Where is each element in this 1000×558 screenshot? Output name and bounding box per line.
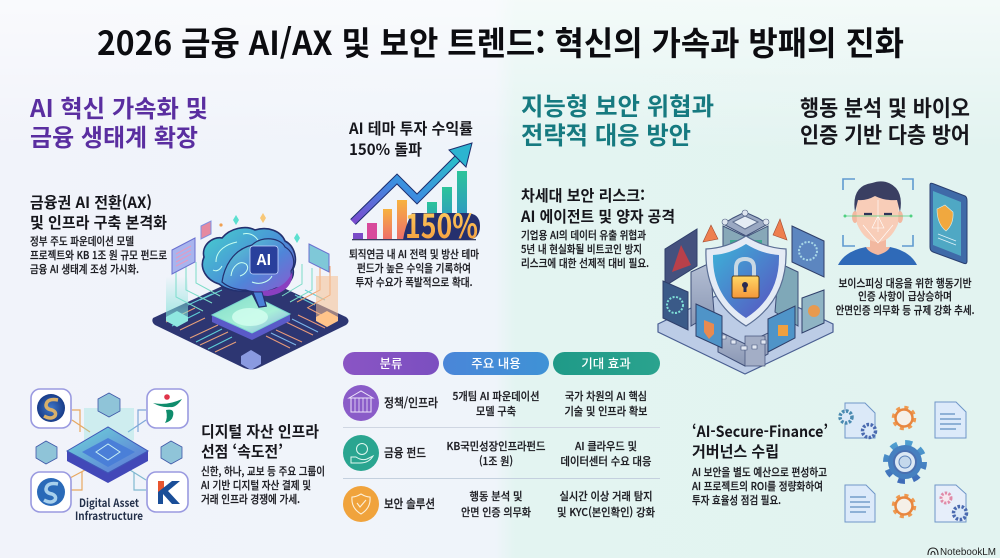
text block: AI-Secure-Finance governance — [692, 420, 828, 508]
text block: AX infrastructure: 및 인프라 구축 본격화 — [30, 211, 167, 233]
text block: digital asset race: 거래 인프라 경쟁에 가세. — [201, 491, 300, 507]
sub: AI chip label: AI — [256, 249, 271, 270]
sub: shield with padlock — [706, 236, 786, 326]
text block: chart description — [349, 246, 479, 290]
logo: NotebookLM: NotebookLM — [940, 546, 996, 558]
icon: document bottom left — [845, 485, 875, 522]
sub: left teal block — [166, 311, 188, 327]
icon: cubes — [36, 393, 182, 464]
sub: fingerprint panel right — [792, 226, 824, 277]
text block: digital asset race: 디지털 자산 인프라 — [201, 420, 319, 442]
sub: tower — [722, 210, 769, 262]
illustration: castle and shield — [658, 210, 833, 374]
label: digital asset infrastructure: Digital Asset — [79, 495, 139, 511]
sub: header pills — [343, 352, 660, 375]
sub: expected effect column: 국가 차원의 AI 핵심 — [565, 388, 647, 404]
label: digital asset infrastructure — [75, 495, 143, 524]
text block: behavioral authentication: 인증 사항이 급상승하며 — [858, 288, 952, 304]
sub: threat panel — [665, 229, 697, 286]
sub: AI chip label — [250, 246, 278, 274]
text block: AI-Secure-Finance governance: ‘AI-Secure-Finance’ — [692, 420, 828, 442]
sub: expected effect column: 데이터센터 수요 대응 — [560, 453, 652, 469]
panel: security section heading: 지능형 보안 위협과 — [521, 88, 714, 123]
text block: behavioral authentication: 안면인증 의무화 등 규제 강화 추세. — [836, 302, 974, 318]
panel: AI innovation section heading: 금융 생태계 확장 — [30, 118, 198, 153]
callout: 150 percent badge: 150% — [405, 200, 478, 248]
panel: investment return chart — [348, 117, 480, 290]
illustration: gears and documents — [840, 402, 966, 522]
text block: digital asset race: 선점 ‘속도전’ — [201, 440, 283, 462]
sub: main content column: 모델 구축 — [476, 403, 516, 419]
icon: central gear — [886, 443, 924, 481]
sub: bottom cube — [241, 350, 261, 370]
panel: security section heading: 전략적 대응 방안 — [521, 117, 691, 152]
icon: policy building — [343, 385, 379, 421]
sub: brain — [202, 228, 295, 307]
sub: header pills: 기대 효과 — [581, 353, 631, 372]
text block: AX infrastructure: 프로젝트와 KB 1조 원 규모 펀드로 — [30, 247, 167, 263]
text block: AX infrastructure: 정부 주도 파운데이션 모델 — [30, 233, 134, 249]
sub: holo beam — [84, 408, 134, 452]
bar chart — [352, 171, 476, 240]
sub: expected effect column: 및 KYC(본인확인) 강화 — [557, 504, 655, 520]
sub: row labels: 보안 솔루션 — [384, 495, 435, 512]
text block: behavioral authentication: 보이스피싱 대응을 위한 행동기반 — [838, 275, 972, 291]
sub: header pills: 분류 — [379, 353, 403, 372]
sub: row labels: 정책/인프라 — [384, 394, 438, 411]
text block: digital asset race — [201, 420, 325, 507]
text block: AI-Secure-Finance governance: AI 프로젝트의 ROI를 정량화하여 — [692, 478, 823, 494]
sub: main content column: 안면 인증 의무화 — [461, 504, 531, 520]
text block: next-gen security risk: 차세대 보안 리스크: — [521, 184, 645, 206]
heading: behavioral and biometric defense: 행동 분석 및 바이오 — [800, 91, 970, 123]
sub: expected effect column: 실시간 이상 거래 탐지 — [560, 488, 652, 504]
text block: next-gen security risk: 5년 내 현실화될 비트코인 방지 — [521, 241, 642, 257]
text block: AX infrastructure — [30, 191, 167, 277]
sub: scan frame — [843, 179, 913, 246]
sub: main content column — [446, 388, 546, 520]
text block: digital asset race: AI 기반 디지털 자산 결제 및 — [201, 477, 311, 493]
sub: main content column: 행동 분석 및 — [470, 488, 522, 504]
illustration: digital asset infrastructure — [31, 389, 188, 524]
text block: behavioral authentication — [836, 275, 974, 318]
sub: fingerprint panel left — [663, 281, 688, 330]
text block: next-gen security risk: 리스크에 대한 선제적 대비 필요. — [521, 255, 649, 271]
arrow: rising trend — [353, 143, 472, 222]
sub: expected effect column — [557, 388, 655, 520]
text block: AI-Secure-Finance governance: 거버넌스 수립 — [692, 440, 779, 462]
illustration: AI brain on circuit platform — [152, 213, 348, 370]
sub: central chip — [212, 296, 290, 340]
sub: main content column: (1조 원) — [479, 453, 513, 469]
sub: row labels — [384, 394, 438, 512]
panel: security section heading — [521, 88, 714, 152]
heading: 150 percent: 150% 돌파 — [349, 138, 422, 160]
heading: 150 percent — [348, 117, 473, 160]
title: 2026 금융 AI/AX 및 보안 트렌드: 혁신의 가속과 방패의 진화 — [97, 17, 904, 65]
icon: document with gears bottom right — [935, 485, 966, 522]
sub: row labels: 금융 펀드 — [384, 444, 426, 461]
text block: AI-Secure-Finance governance: AI 보안을 별도 예산으로 편성하고 — [692, 464, 827, 480]
panel: AI innovation section heading — [29, 89, 208, 153]
sub: floating holo panels — [172, 221, 329, 274]
sub: warning triangles — [703, 219, 787, 242]
text block: AI-Secure-Finance governance: 투자 효율성 점검 필요. — [692, 492, 781, 508]
icon: Shinhan logo top — [31, 389, 71, 428]
sub: front blocks — [696, 290, 824, 352]
sub: sparkles — [219, 213, 300, 243]
sub: expected effect column: AI 클라우드 및 — [575, 438, 637, 454]
icon: security shield — [343, 486, 379, 522]
text block: chart description: 퇴직연금 내 AI 전력 및 방산 테마 — [349, 246, 479, 262]
illustration: face recognition — [838, 179, 917, 265]
sub: expected effect column: 기술 및 인프라 확보 — [564, 403, 648, 419]
icon: orange gear top — [894, 408, 914, 428]
sub: central platform — [67, 427, 148, 483]
sub: walls — [691, 263, 714, 326]
text block: AX infrastructure: 금융 AI 생태계 조성 가시화. — [30, 261, 139, 277]
text block: AX infrastructure: 금융권 AI 전환(AX) — [30, 191, 152, 213]
icon: phone with shield — [930, 183, 967, 264]
icon: K logo — [147, 472, 188, 512]
icon: orange gear bottom — [894, 496, 914, 516]
text block: next-gen security risk — [520, 184, 675, 271]
icon: document with gears top — [840, 403, 876, 438]
text block: chart description: 펀드가 높은 수익을 기록하여 — [357, 260, 471, 276]
label: digital asset infrastructure: Infrastructure — [75, 508, 143, 524]
icon: Hana logo — [147, 389, 188, 428]
icon: document top right — [935, 402, 966, 438]
panel: AI innovation section heading: AI 혁신 가속화 및 — [29, 89, 208, 124]
text block: chart description: 투자 수요가 폭발적으로 확대. — [356, 274, 472, 290]
sub: main content column: KB국민성장인프라펀드 — [446, 438, 546, 454]
heading: 150 percent: AI 테마 투자 수익률 — [348, 117, 473, 139]
panel: summary table — [343, 352, 660, 522]
sub: main content column: 5개팀 AI 파운데이션 — [452, 388, 540, 404]
heading: behavioral and biometric defense: 인증 기반 다층 방어 — [800, 118, 970, 150]
text block: next-gen security risk: AI 에이전트 및 양자 공격 — [520, 205, 675, 227]
sub: right orange block — [316, 311, 338, 327]
icon: money hand — [343, 435, 379, 471]
heading: behavioral and biometric defense — [800, 91, 970, 150]
icon: Shinhan logo bottom — [31, 472, 71, 512]
text block: next-gen security risk: 기업용 AI의 데이터 유출 위협과 — [521, 227, 646, 243]
text block: digital asset race: 신한, 하나, 교보 등 주요 그룹이 — [201, 463, 325, 479]
sub: header pills: 주요 내용 — [471, 353, 521, 372]
